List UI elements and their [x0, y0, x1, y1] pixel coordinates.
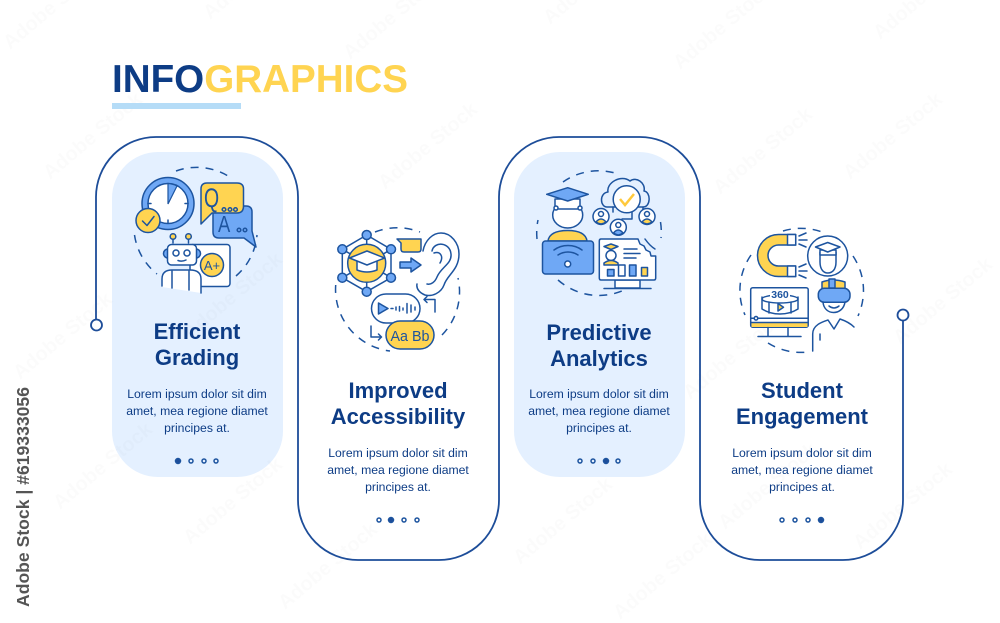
text: Adobe Stock — [889, 253, 998, 349]
icon: student engagement: 360 — [771, 289, 789, 301]
text block: card 1: principes at. — [164, 421, 230, 435]
heading: Efficient Grading: Efficient — [154, 319, 241, 344]
pagination: card 4 — [780, 518, 824, 522]
text: Adobe Stock — [9, 288, 118, 384]
pagination: card 1 — [176, 458, 218, 464]
heading: Improved Accessibility: Accessibility — [331, 404, 466, 429]
pagination: card 3 — [578, 458, 620, 464]
panel: blue card backgrounds — [112, 152, 685, 477]
text block: card 3: principes at. — [566, 421, 632, 435]
text block: card 1: amet, mea regione diamet — [126, 404, 268, 418]
text: Adobe Stock — [839, 88, 948, 184]
text: Adobe Stock — [179, 453, 288, 549]
text: Adobe Stock — [709, 103, 818, 199]
stock credit: Adobe Stock | #619333056 — [13, 387, 33, 607]
text block: card 3: amet, mea regione diamet — [528, 404, 670, 418]
heading: Efficient Grading: Grading — [155, 345, 239, 370]
text: Adobe Stock — [374, 98, 483, 194]
text block: card 4: amet, mea regione diamet — [731, 463, 873, 477]
icon: student engagement — [740, 228, 863, 352]
text block: card 2: principes at. — [365, 480, 431, 494]
text block: card 4: principes at. — [769, 480, 835, 494]
text block: card 1: Lorem ipsum dolor sit dim — [127, 387, 267, 401]
text block: card 4: Lorem ipsum dolor sit dim — [732, 446, 872, 460]
icon: improved accessibility: Aa Bb — [390, 328, 430, 345]
text: Adobe Stock — [179, 248, 288, 344]
pagination: card 2 — [377, 518, 419, 522]
icon: efficient grading — [134, 167, 257, 293]
heading: Predictive Analytics: Analytics — [550, 346, 648, 371]
title: INFOGRAPHICS — [112, 58, 408, 101]
outline connector — [91, 137, 908, 560]
icon: improved accessibility — [336, 228, 460, 351]
text: Adobe Stock — [49, 418, 158, 514]
text: Adobe Stock — [679, 308, 788, 404]
text: Adobe Stock — [849, 458, 958, 554]
text: Adobe Stock — [609, 528, 718, 623]
heading: Predictive Analytics: Predictive — [546, 320, 652, 345]
heading: Improved Accessibility: Improved — [348, 378, 448, 403]
heading: Student Engagement: Engagement — [736, 404, 869, 429]
heading: Student Engagement: Student — [761, 378, 844, 403]
text: Adobe Stock — [39, 88, 148, 184]
icon: predictive analytics — [537, 171, 661, 295]
text block: card 2: amet, mea regione diamet — [327, 463, 469, 477]
text block: card 3: Lorem ipsum dolor sit dim — [529, 387, 669, 401]
icon: efficient grading: A+ — [204, 258, 220, 273]
icon: efficient grading: Q — [204, 183, 219, 213]
icon: efficient grading: A — [218, 212, 230, 238]
text: Adobe Stock — [714, 438, 823, 534]
text: Adobe Stock — [274, 518, 383, 614]
text: Adobe Stock — [509, 473, 618, 569]
text block: card 2: Lorem ipsum dolor sit dim — [328, 446, 468, 460]
